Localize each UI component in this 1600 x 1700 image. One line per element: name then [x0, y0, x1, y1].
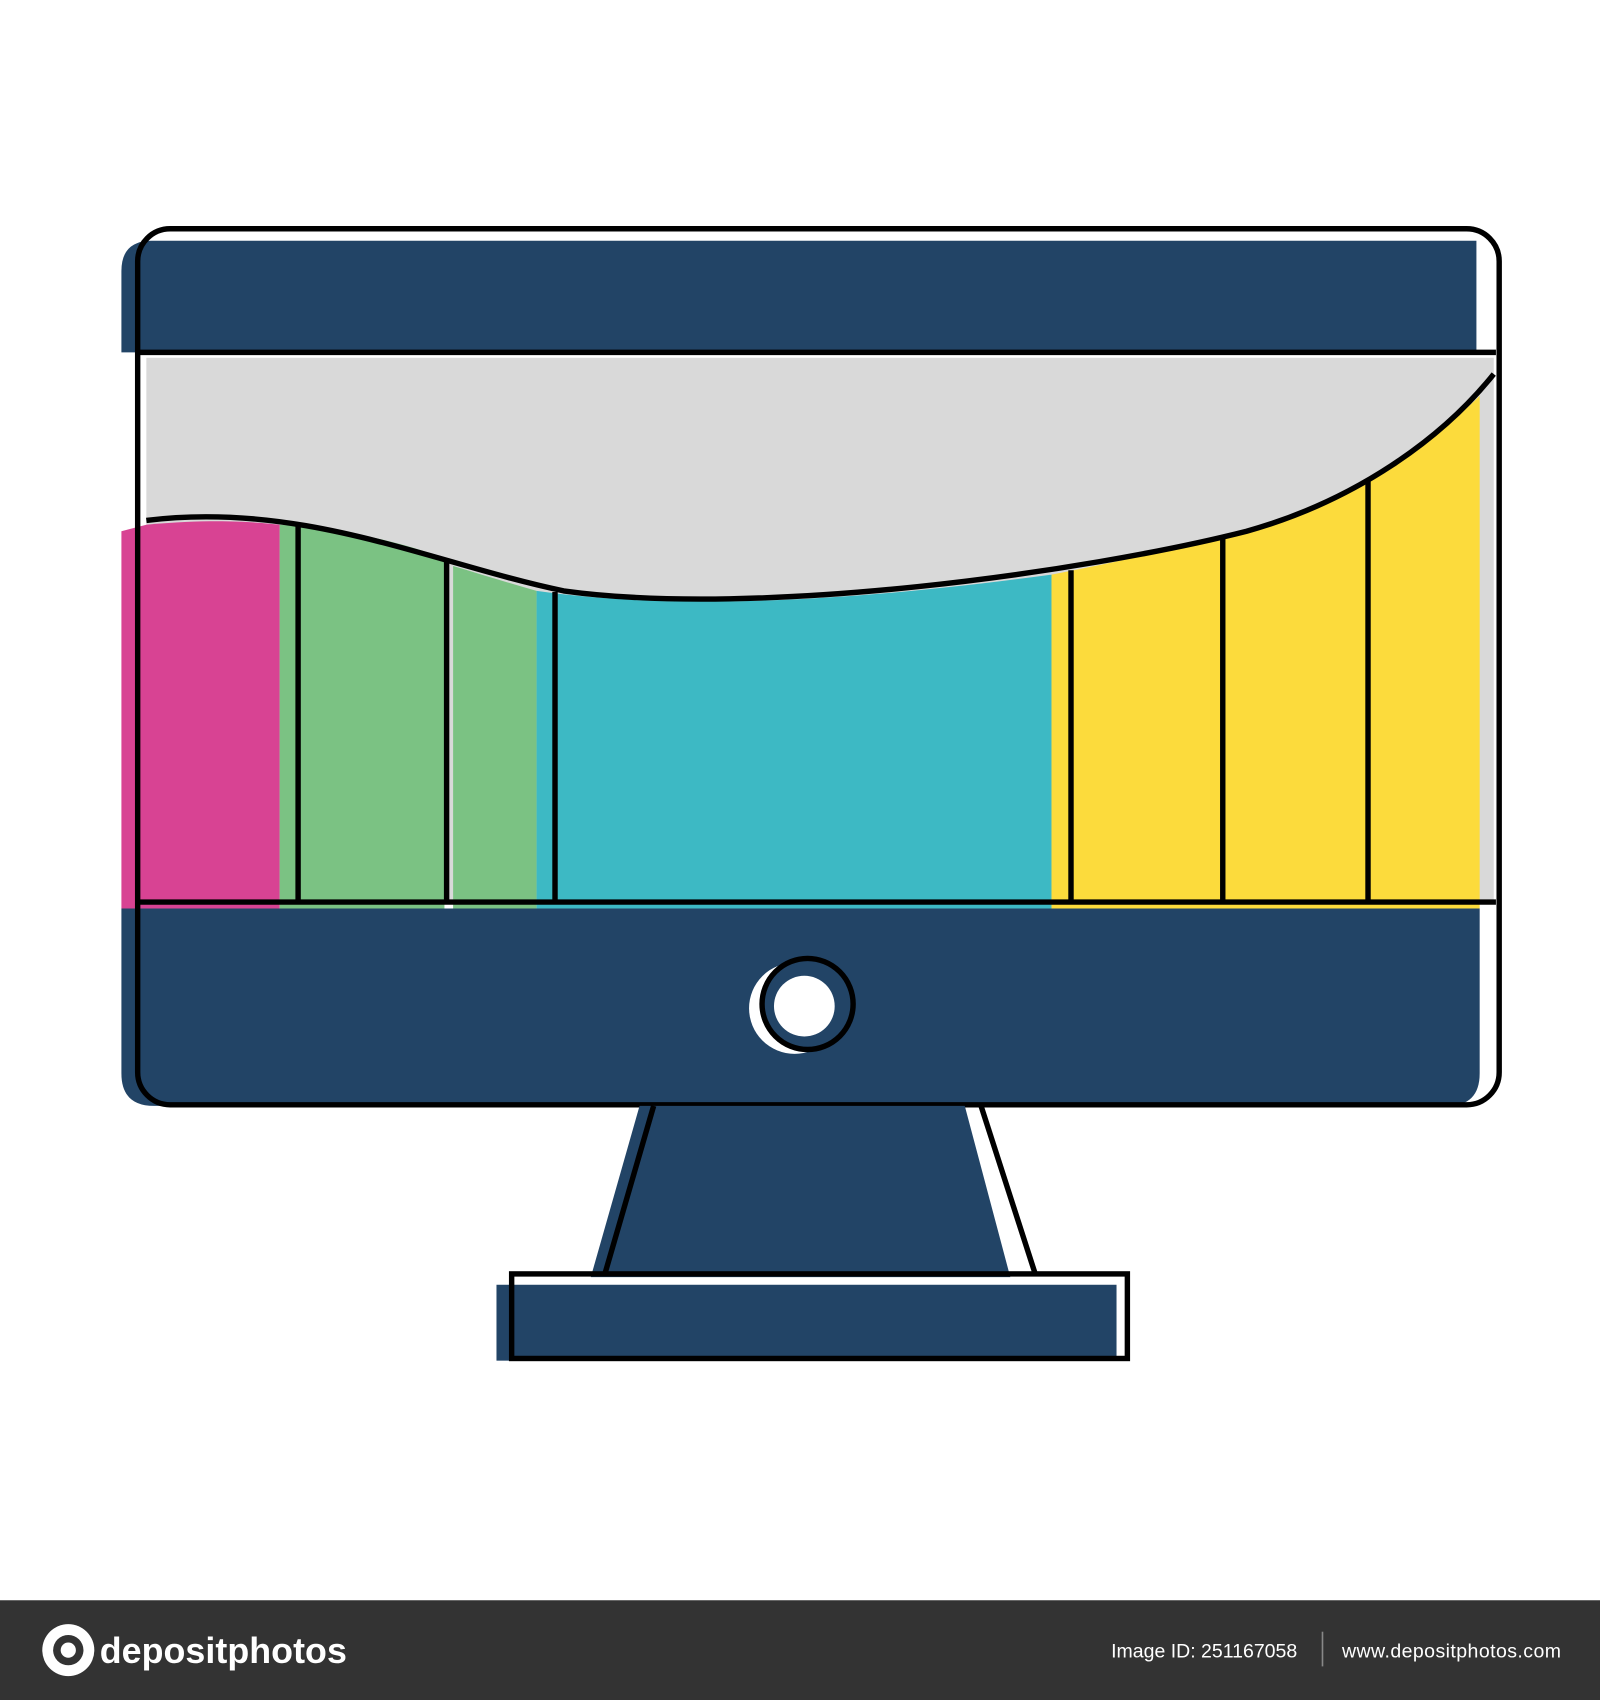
monitor outline [138, 229, 1499, 1105]
footer bar: depositphotos [100, 1631, 347, 1671]
stand [496, 1106, 1127, 1361]
icon: power button [749, 958, 853, 1054]
bar chart [121, 374, 1494, 909]
footer bar: www.depositphotos.com [1341, 1641, 1561, 1663]
footer bar: Image ID: 251167058 [1111, 1641, 1297, 1663]
footer bar [0, 1600, 1600, 1700]
monitor body [121, 241, 1494, 1106]
